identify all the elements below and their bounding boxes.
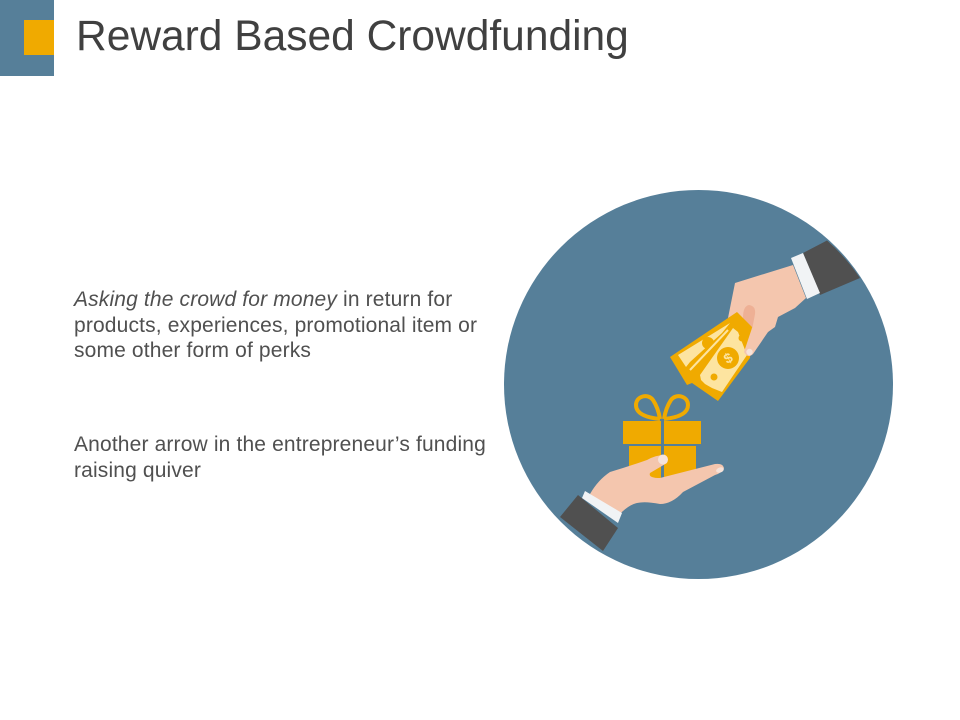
gift ribbon xyxy=(661,421,664,479)
icon: money bills xyxy=(670,312,770,401)
icon: money bills: $ xyxy=(721,349,736,367)
text block: asking the crowd xyxy=(73,288,477,362)
front bill face xyxy=(700,328,747,392)
icon: lower hand xyxy=(560,454,725,551)
gift lid xyxy=(623,421,701,444)
text block: asking the crowd: some other form of perks xyxy=(74,339,311,362)
upper cuff xyxy=(791,253,820,299)
back bill face xyxy=(678,323,730,367)
accent square xyxy=(24,20,54,55)
gift bow xyxy=(636,396,688,419)
upper sleeve xyxy=(803,240,860,295)
text block: asking the crowd: products, experiences, promotional item or xyxy=(74,314,477,336)
finger shading xyxy=(743,305,755,330)
dollar coin xyxy=(717,347,739,369)
lower palm xyxy=(590,455,724,516)
header accent block xyxy=(0,0,54,76)
text block: asking the crowd: Asking the crowd for money in return for xyxy=(74,288,452,311)
gift base xyxy=(629,446,696,479)
icon: upper hand xyxy=(728,240,860,340)
text block: another arrow xyxy=(74,433,486,482)
bill outline xyxy=(670,312,752,401)
lower cuff xyxy=(582,491,622,523)
text block: another arrow: Another arrow in the entrepreneur’s funding xyxy=(74,433,486,456)
back bill medallion xyxy=(702,337,714,349)
blue circle xyxy=(504,190,893,579)
title: Reward Based Crowdfunding xyxy=(76,13,629,60)
text block: another arrow: raising quiver xyxy=(74,458,201,482)
finger over the bill xyxy=(744,328,770,356)
lower sleeve xyxy=(560,495,618,551)
finger nail xyxy=(715,466,725,474)
upper palm xyxy=(728,265,806,340)
icon: gift box xyxy=(623,396,701,479)
thumb nail xyxy=(658,454,668,464)
middle bill edge xyxy=(690,330,728,370)
finger nail xyxy=(746,349,753,355)
